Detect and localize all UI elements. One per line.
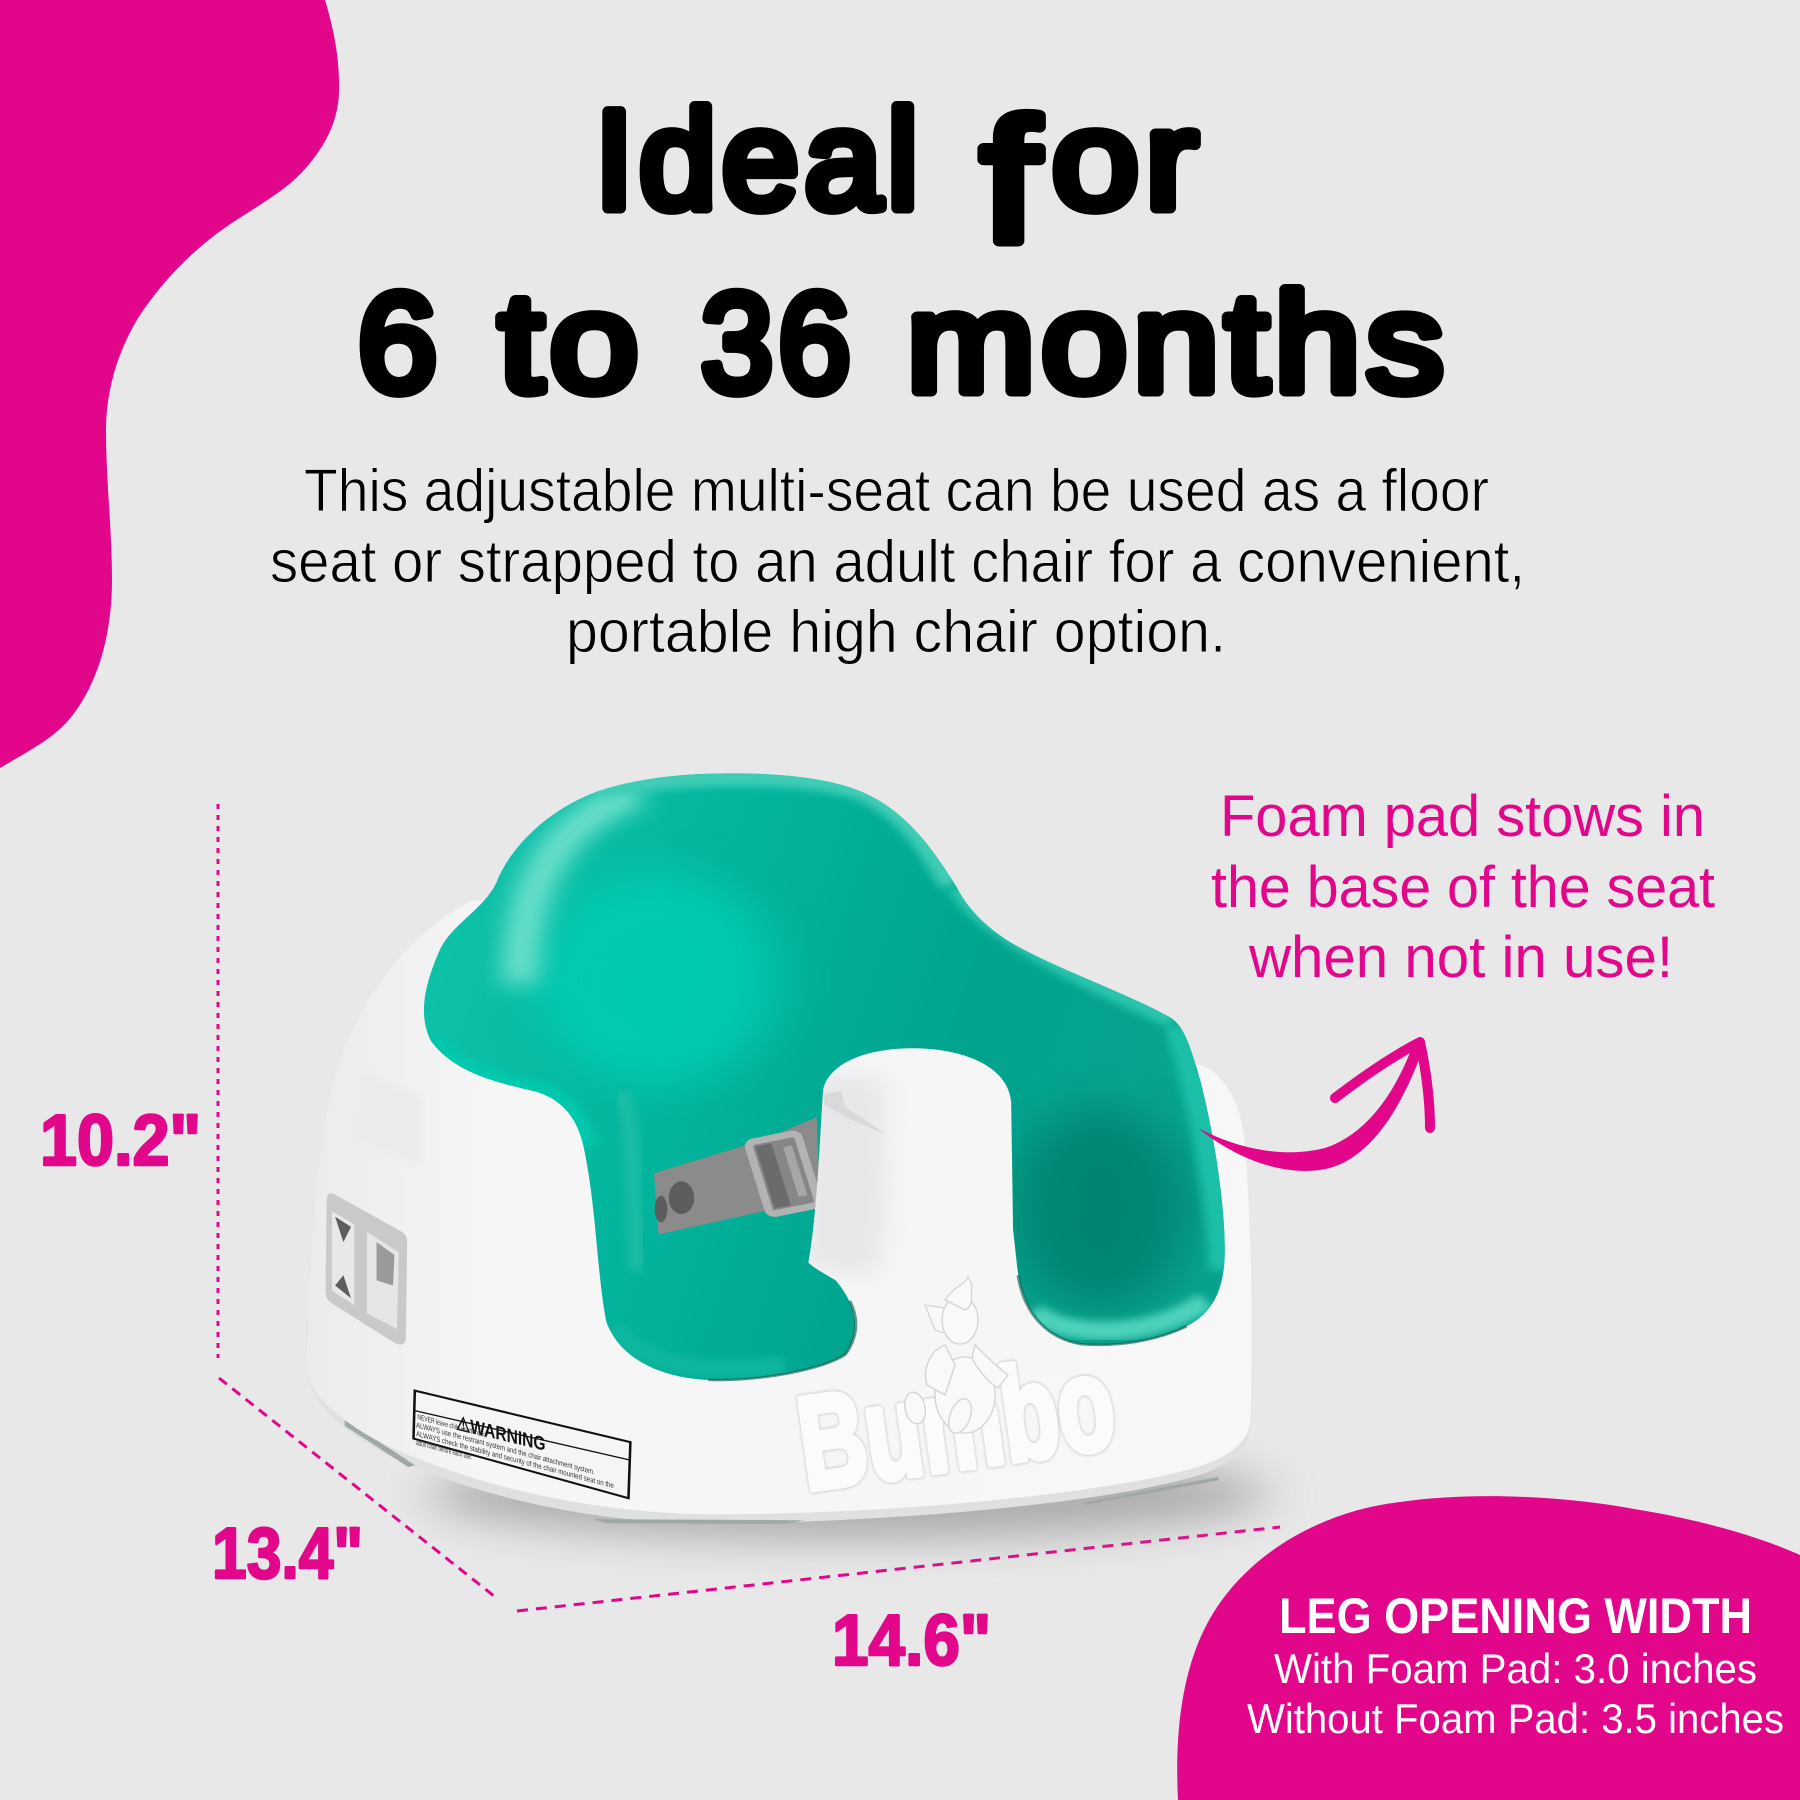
- description line 3: portable high chair option.: [566, 598, 1226, 665]
- base lip: [306, 1321, 1250, 1523]
- crease shadow under seat edge: [708, 1275, 1187, 1380]
- warning small print line 1: NEVER leave child unattended.: [417, 1412, 488, 1439]
- title number 6: 6: [358, 264, 437, 421]
- left lower rim: [431, 1041, 584, 1148]
- callout line 2: the base of the seat: [1211, 855, 1715, 920]
- warning small print line 3: ALWAYS check the stability and security of the chair mounted seat on the: [416, 1429, 614, 1490]
- product photo: multi-seat: [306, 773, 1269, 1541]
- description text: [270, 457, 1525, 665]
- callout line 1: Foam pad stows in: [1220, 784, 1705, 849]
- side clip panel: [326, 1193, 407, 1344]
- grey harness strap: [654, 1117, 820, 1234]
- warning label: [414, 1391, 630, 1498]
- curved arrow to seat base: [1198, 1042, 1430, 1171]
- title word: to: to: [499, 264, 645, 421]
- top rim highlight: [600, 777, 951, 885]
- decorative pink blob top left: [0, 0, 339, 768]
- base feet: [345, 1419, 1218, 1524]
- warning heading: ⚠WARNING: [456, 1412, 546, 1455]
- panel: leg opening width: [1177, 1496, 1800, 1800]
- embossed logo and mascot: [789, 1277, 1123, 1518]
- white pommel: [808, 1048, 1081, 1382]
- title word: Ideal: Ideal: [595, 81, 924, 238]
- title word: for, letters or: or: [1052, 81, 1204, 238]
- warning label: adult chair before each use.: [416, 1438, 472, 1461]
- title word: for, letter f: f: [981, 84, 1039, 279]
- description line 2: seat or strapped to an adult chair for a convenient,: [270, 528, 1525, 595]
- bright back panel: [536, 872, 778, 1087]
- ground shadow: [428, 1449, 1269, 1541]
- dimension label: height: 10.2": [40, 1101, 201, 1181]
- description line 1: This adjustable multi-seat can be used as a floor: [304, 457, 1489, 524]
- warning small print line 2: ALWAYS use the restraint system and the chair attachment system.: [416, 1420, 595, 1476]
- strap logo mark: [655, 1181, 694, 1222]
- without foam pad measurement: Without Foam Pad: 3.5 inches: [1247, 1695, 1784, 1742]
- base recess shading: [354, 1071, 421, 1168]
- top-left highlight band: [520, 792, 638, 984]
- dimension label: depth: 13.4": [212, 1514, 363, 1594]
- right rim highlight: [1177, 1025, 1222, 1270]
- teal foam seat: [424, 773, 1225, 1380]
- title word: months: months: [907, 264, 1450, 421]
- title: [358, 81, 1450, 421]
- embossed elephant mascot: [902, 1277, 1008, 1436]
- white base: [306, 900, 1252, 1514]
- seat shading: [431, 777, 1222, 1369]
- upper right rim highlight: [957, 888, 1174, 1020]
- panel heading: LEG OPENING WIDTH: [1279, 1588, 1752, 1644]
- embossed Bumbo logo: Bumbo: [789, 1328, 1123, 1518]
- with foam pad measurement: With Foam Pad: 3.0 inches: [1274, 1645, 1757, 1692]
- strap buckle: [748, 1133, 820, 1215]
- height dimension line: [216, 804, 220, 1358]
- panel blob: [1177, 1496, 1800, 1800]
- pommel side shading: [804, 1076, 886, 1275]
- pommel notch: [824, 1091, 887, 1135]
- embossed Bumbo logo shadow: Bumbo: [789, 1328, 1123, 1518]
- callout line 3: when not in use!: [1248, 925, 1673, 990]
- dimension label: width: 14.6": [832, 1601, 991, 1681]
- right inner shadow: [1011, 1107, 1190, 1311]
- depth dimension line: [219, 1378, 494, 1596]
- left ridge highlight: [622, 1092, 638, 1270]
- right footwell lip: [1033, 1301, 1206, 1331]
- left footwell lip: [613, 1326, 785, 1369]
- width dimension line: [517, 1527, 1280, 1611]
- foam pad callout: [1211, 784, 1715, 990]
- title number 36: 36: [701, 264, 856, 421]
